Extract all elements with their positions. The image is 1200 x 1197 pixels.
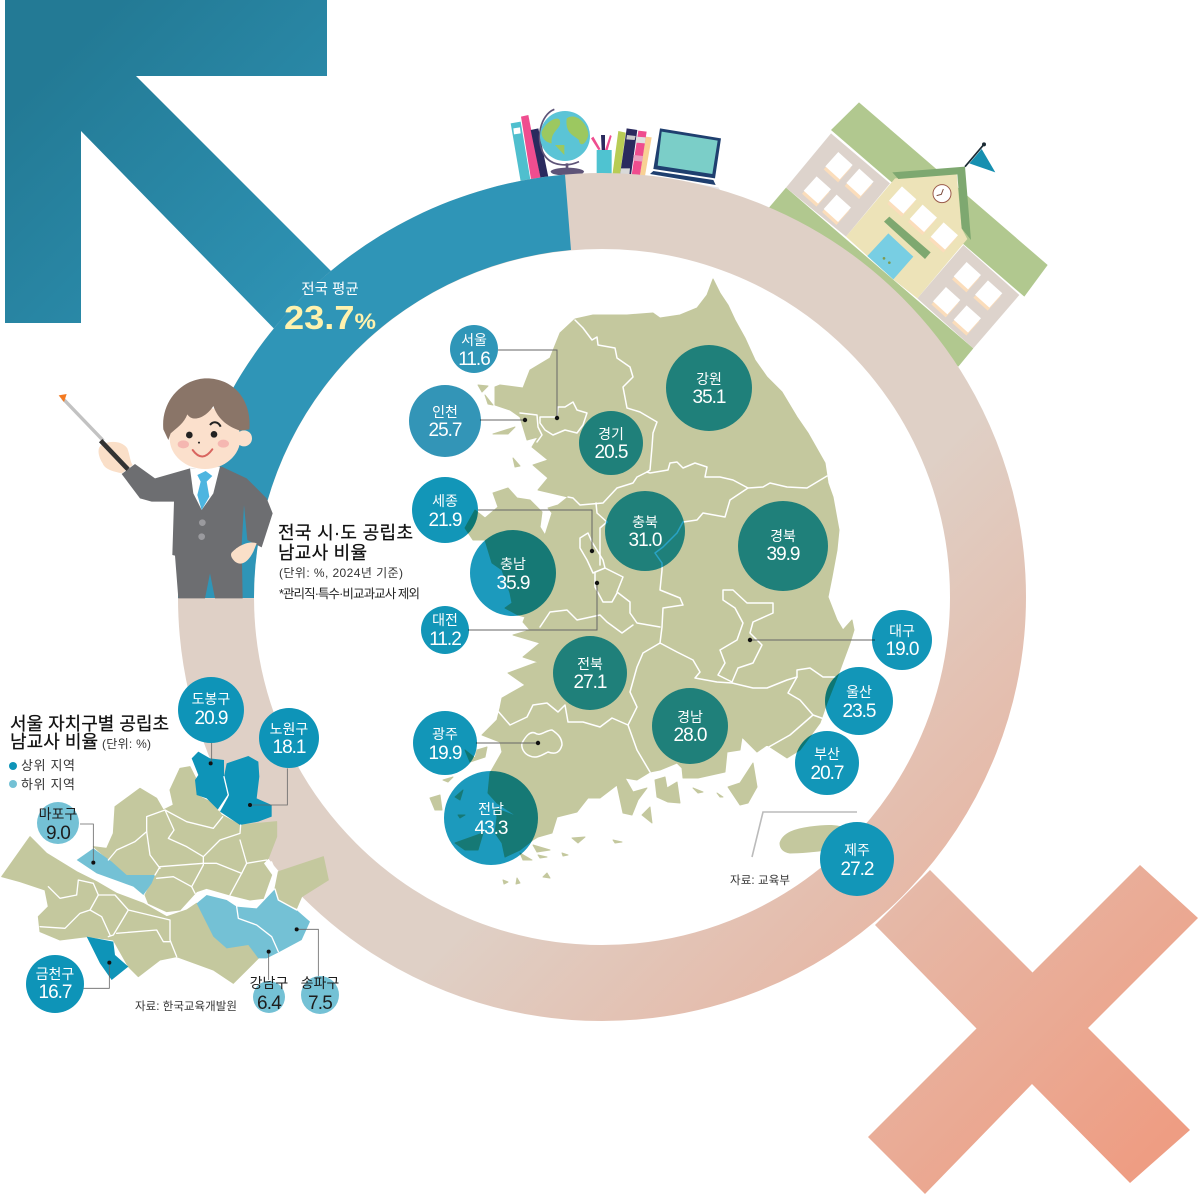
- bubble: 부산: 20.7: [811, 763, 844, 784]
- icon: school building: [768, 102, 1048, 367]
- map: Seoul districts: [2, 737, 328, 988]
- high-ratio district: Nowon: [220, 756, 272, 825]
- low-ratio districts: Gangnam, Songpa: [197, 889, 310, 958]
- heading: Seoul chart title and legend: 하위 지역: [21, 777, 75, 792]
- bubble: 대전: [421, 606, 469, 654]
- bubble: 충북: [605, 491, 685, 571]
- male symbol arrow: [5, 0, 360, 345]
- bubble: 인천: 인천: [432, 404, 458, 420]
- bubble: 도봉구: 도봉구: [192, 691, 230, 707]
- bubble: 강원: 35.1: [693, 387, 726, 408]
- female symbol cross: [868, 865, 1198, 1194]
- bubble: 전북: [553, 636, 627, 710]
- Seoul land: [2, 767, 328, 983]
- bubble: 마포구: 9.0: [46, 823, 70, 844]
- bubble: 인천: 25.7: [429, 420, 462, 441]
- bubble: 노원구: [259, 708, 319, 768]
- bubble: 인천: [409, 385, 481, 457]
- leader lines and dots: [468, 350, 875, 745]
- bubble: 강원: 강원: [696, 371, 722, 387]
- province boundaries: [497, 320, 835, 772]
- bubble: 광주: 광주: [432, 726, 458, 742]
- bubble: 대전: 11.2: [429, 629, 461, 650]
- bubble: 경북: 경북: [770, 528, 796, 544]
- bubble: 전북: 27.1: [574, 672, 607, 693]
- map: South Korea provinces with bubbles: [409, 279, 932, 896]
- ring: male share arc, national average: [178, 175, 571, 598]
- land mass: [430, 279, 854, 884]
- low-ratio district: Mapo: [77, 848, 155, 895]
- icon: books, globe, pencil cup and laptop: [511, 109, 723, 195]
- bubble: 경기: 20.5: [595, 442, 628, 463]
- heading: national chart title: *관리직·특수·비교과교사 제외: [279, 587, 420, 601]
- high-ratio district: Dobong: [192, 752, 228, 810]
- bubble: 울산: 23.5: [843, 701, 876, 722]
- bubble: 제주: [820, 822, 894, 896]
- bubble: 세종: 21.9: [429, 510, 462, 531]
- heading: Seoul chart title and legend: [9, 714, 169, 792]
- bubble: 충남: 35.9: [497, 573, 530, 594]
- bubble: 대전: 대전: [432, 612, 458, 628]
- heading: national chart title: (단위: %, 2024년 기준): [279, 566, 403, 580]
- high-ratio district: Geumcheon: [87, 937, 128, 980]
- heading: Seoul chart title and legend: 남교사 비율: [10, 732, 98, 752]
- heading: national chart title: [278, 523, 420, 601]
- bubble: 마포구: [37, 802, 79, 844]
- bubble: 경북: 39.9: [767, 544, 800, 565]
- bubble: 광주: 19.9: [429, 743, 462, 764]
- illustration: male teacher with pointer: [59, 378, 273, 598]
- bubble: 강남구: 강남구: [250, 975, 288, 991]
- national average label: [284, 281, 376, 336]
- bubble: 충남: [470, 530, 556, 616]
- bubble: 전북: 전북: [577, 656, 603, 672]
- bubble: 대구: 대구: [889, 623, 915, 639]
- bubble: 노원구: 노원구: [270, 721, 308, 737]
- bubble: 송파구: [301, 975, 339, 1014]
- bubble: 도봉구: 20.9: [195, 708, 228, 729]
- bubble: 경남: 28.0: [674, 725, 707, 746]
- bubble: 금천구: 금천구: [36, 966, 74, 982]
- bubble: 송파구: 송파구: [301, 975, 339, 991]
- bubble: 노원구: 18.1: [273, 737, 306, 758]
- bubble: 서울: 서울: [461, 332, 487, 348]
- bubble: 강남구: 6.4: [257, 993, 282, 1014]
- district boundaries: [40, 777, 297, 957]
- bubble: 경기: [579, 411, 643, 475]
- bubble: 서울: [450, 325, 498, 373]
- bubble: 전남: [444, 771, 538, 865]
- heading: national chart title: 전국 시·도 공립초: [278, 523, 413, 543]
- source: Ministry of Education: 자료: 교육부: [730, 874, 790, 887]
- heading: Seoul chart title and legend: 상위 지역: [21, 758, 75, 773]
- heading: national chart title: 남교사 비율: [278, 543, 367, 563]
- bubble: 울산: 울산: [846, 684, 872, 700]
- bubble: 송파구: 7.5: [308, 993, 332, 1014]
- source: Korean Educational Development Institute: 자료: 한국교육개발원: [135, 999, 237, 1013]
- bubble: 강원: [666, 345, 752, 431]
- bubble: 전남: 전남: [478, 801, 504, 817]
- bubble: 마포구: 마포구: [39, 806, 77, 822]
- bubble: 대구: [872, 610, 932, 670]
- bubble: 광주: [413, 711, 477, 775]
- national average label: 전국 평균: [301, 281, 359, 298]
- bubble: 금천구: 16.7: [39, 982, 72, 1003]
- Jeju inset line: [752, 812, 857, 857]
- bubble: 대구: 19.0: [886, 639, 919, 660]
- heading: Seoul chart title and legend: 서울 자치구별 공립초: [10, 714, 169, 734]
- bubble: 세종: [412, 477, 478, 543]
- heading: Seoul chart title and legend: (단위: %): [102, 737, 151, 751]
- Han river gap: [30, 840, 275, 917]
- bubble: 부산: [795, 731, 859, 795]
- bubble: 제주: 27.2: [841, 859, 874, 880]
- bubble: 경기: 경기: [598, 426, 624, 442]
- bubble: 전남: 43.3: [475, 818, 508, 839]
- bubble: 경남: [652, 688, 728, 764]
- bubble: 부산: 부산: [814, 746, 840, 762]
- bubble: 금천구: [26, 955, 84, 1013]
- bubble: 충남: 충남: [500, 556, 526, 572]
- bubble: 충북: 31.0: [629, 530, 662, 551]
- ring: female share (beige): [216, 211, 988, 983]
- bubble: 서울: 11.6: [458, 349, 490, 370]
- bubble: 경남: 경남: [677, 709, 703, 725]
- bubble: 강남구: [250, 975, 288, 1014]
- bubble: 세종: 세종: [432, 493, 458, 509]
- bubble: 울산: [825, 667, 893, 735]
- bubble: 충북: 충북: [632, 514, 658, 530]
- bubble: 도봉구: [178, 677, 244, 743]
- national average label: 23.7 %: [284, 299, 376, 336]
- bubble: 제주: 제주: [844, 842, 870, 858]
- bubble: 경북: [738, 501, 828, 591]
- Seoul leader lines: [80, 737, 318, 988]
